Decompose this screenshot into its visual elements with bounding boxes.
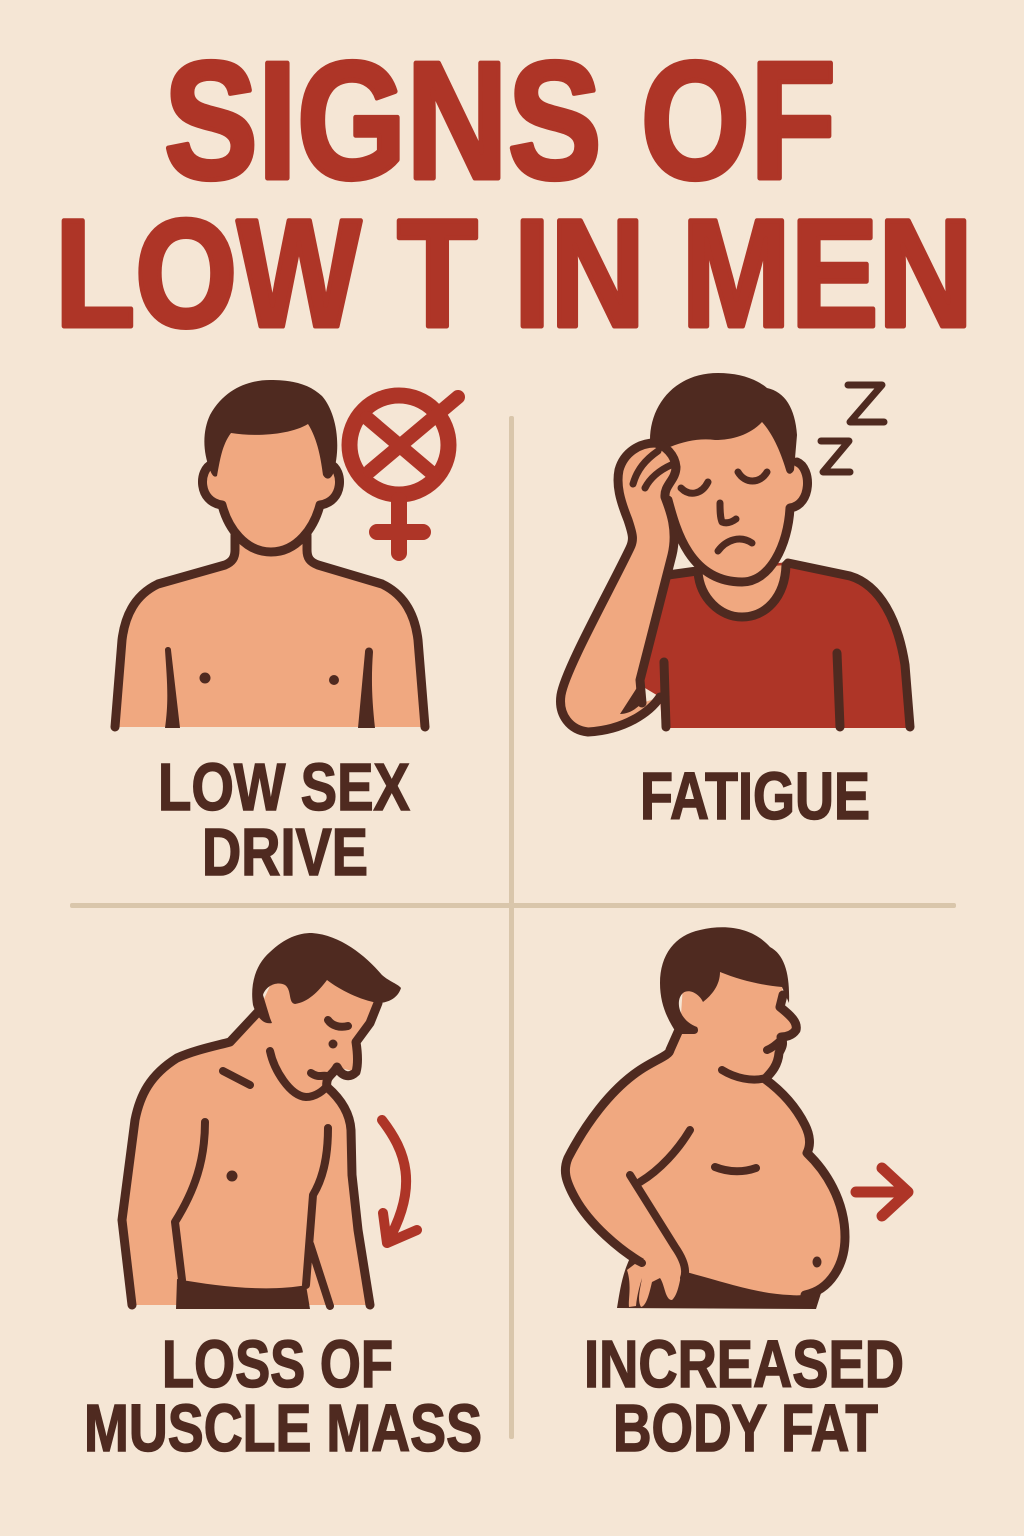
label: loss of muscle mass: LOSS OF (162, 1327, 393, 1402)
panel: fatigue (561, 373, 912, 834)
label: fatigue: FATIGUE (640, 759, 870, 834)
label: loss of muscle mass: MUSCLE MASS (84, 1391, 482, 1466)
icon: curved down arrow (382, 1120, 417, 1243)
icon: slumped thin man (122, 933, 401, 1309)
title: SIGNS OF (164, 28, 836, 214)
title (55, 28, 973, 359)
label: increased body fat: BODY FAT (613, 1391, 878, 1466)
panel: low sex drive (115, 380, 458, 890)
icon: right arrow (856, 1168, 908, 1216)
label: increased body fat: INCREASED (584, 1327, 904, 1402)
label: increased body fat (584, 1327, 904, 1466)
label: low sex drive: DRIVE (202, 815, 368, 890)
icon: crossed-out female symbol (350, 396, 458, 553)
label: low sex drive: LOW SEX (158, 750, 410, 825)
icon: overweight man in profile (565, 927, 845, 1309)
label: low sex drive (158, 750, 410, 890)
panel: loss of muscle mass (84, 933, 482, 1466)
label: loss of muscle mass (84, 1327, 482, 1466)
panel: increased body fat (565, 927, 908, 1466)
icon: tired man holding head (561, 373, 912, 732)
icon: man with bare chest (115, 380, 425, 728)
